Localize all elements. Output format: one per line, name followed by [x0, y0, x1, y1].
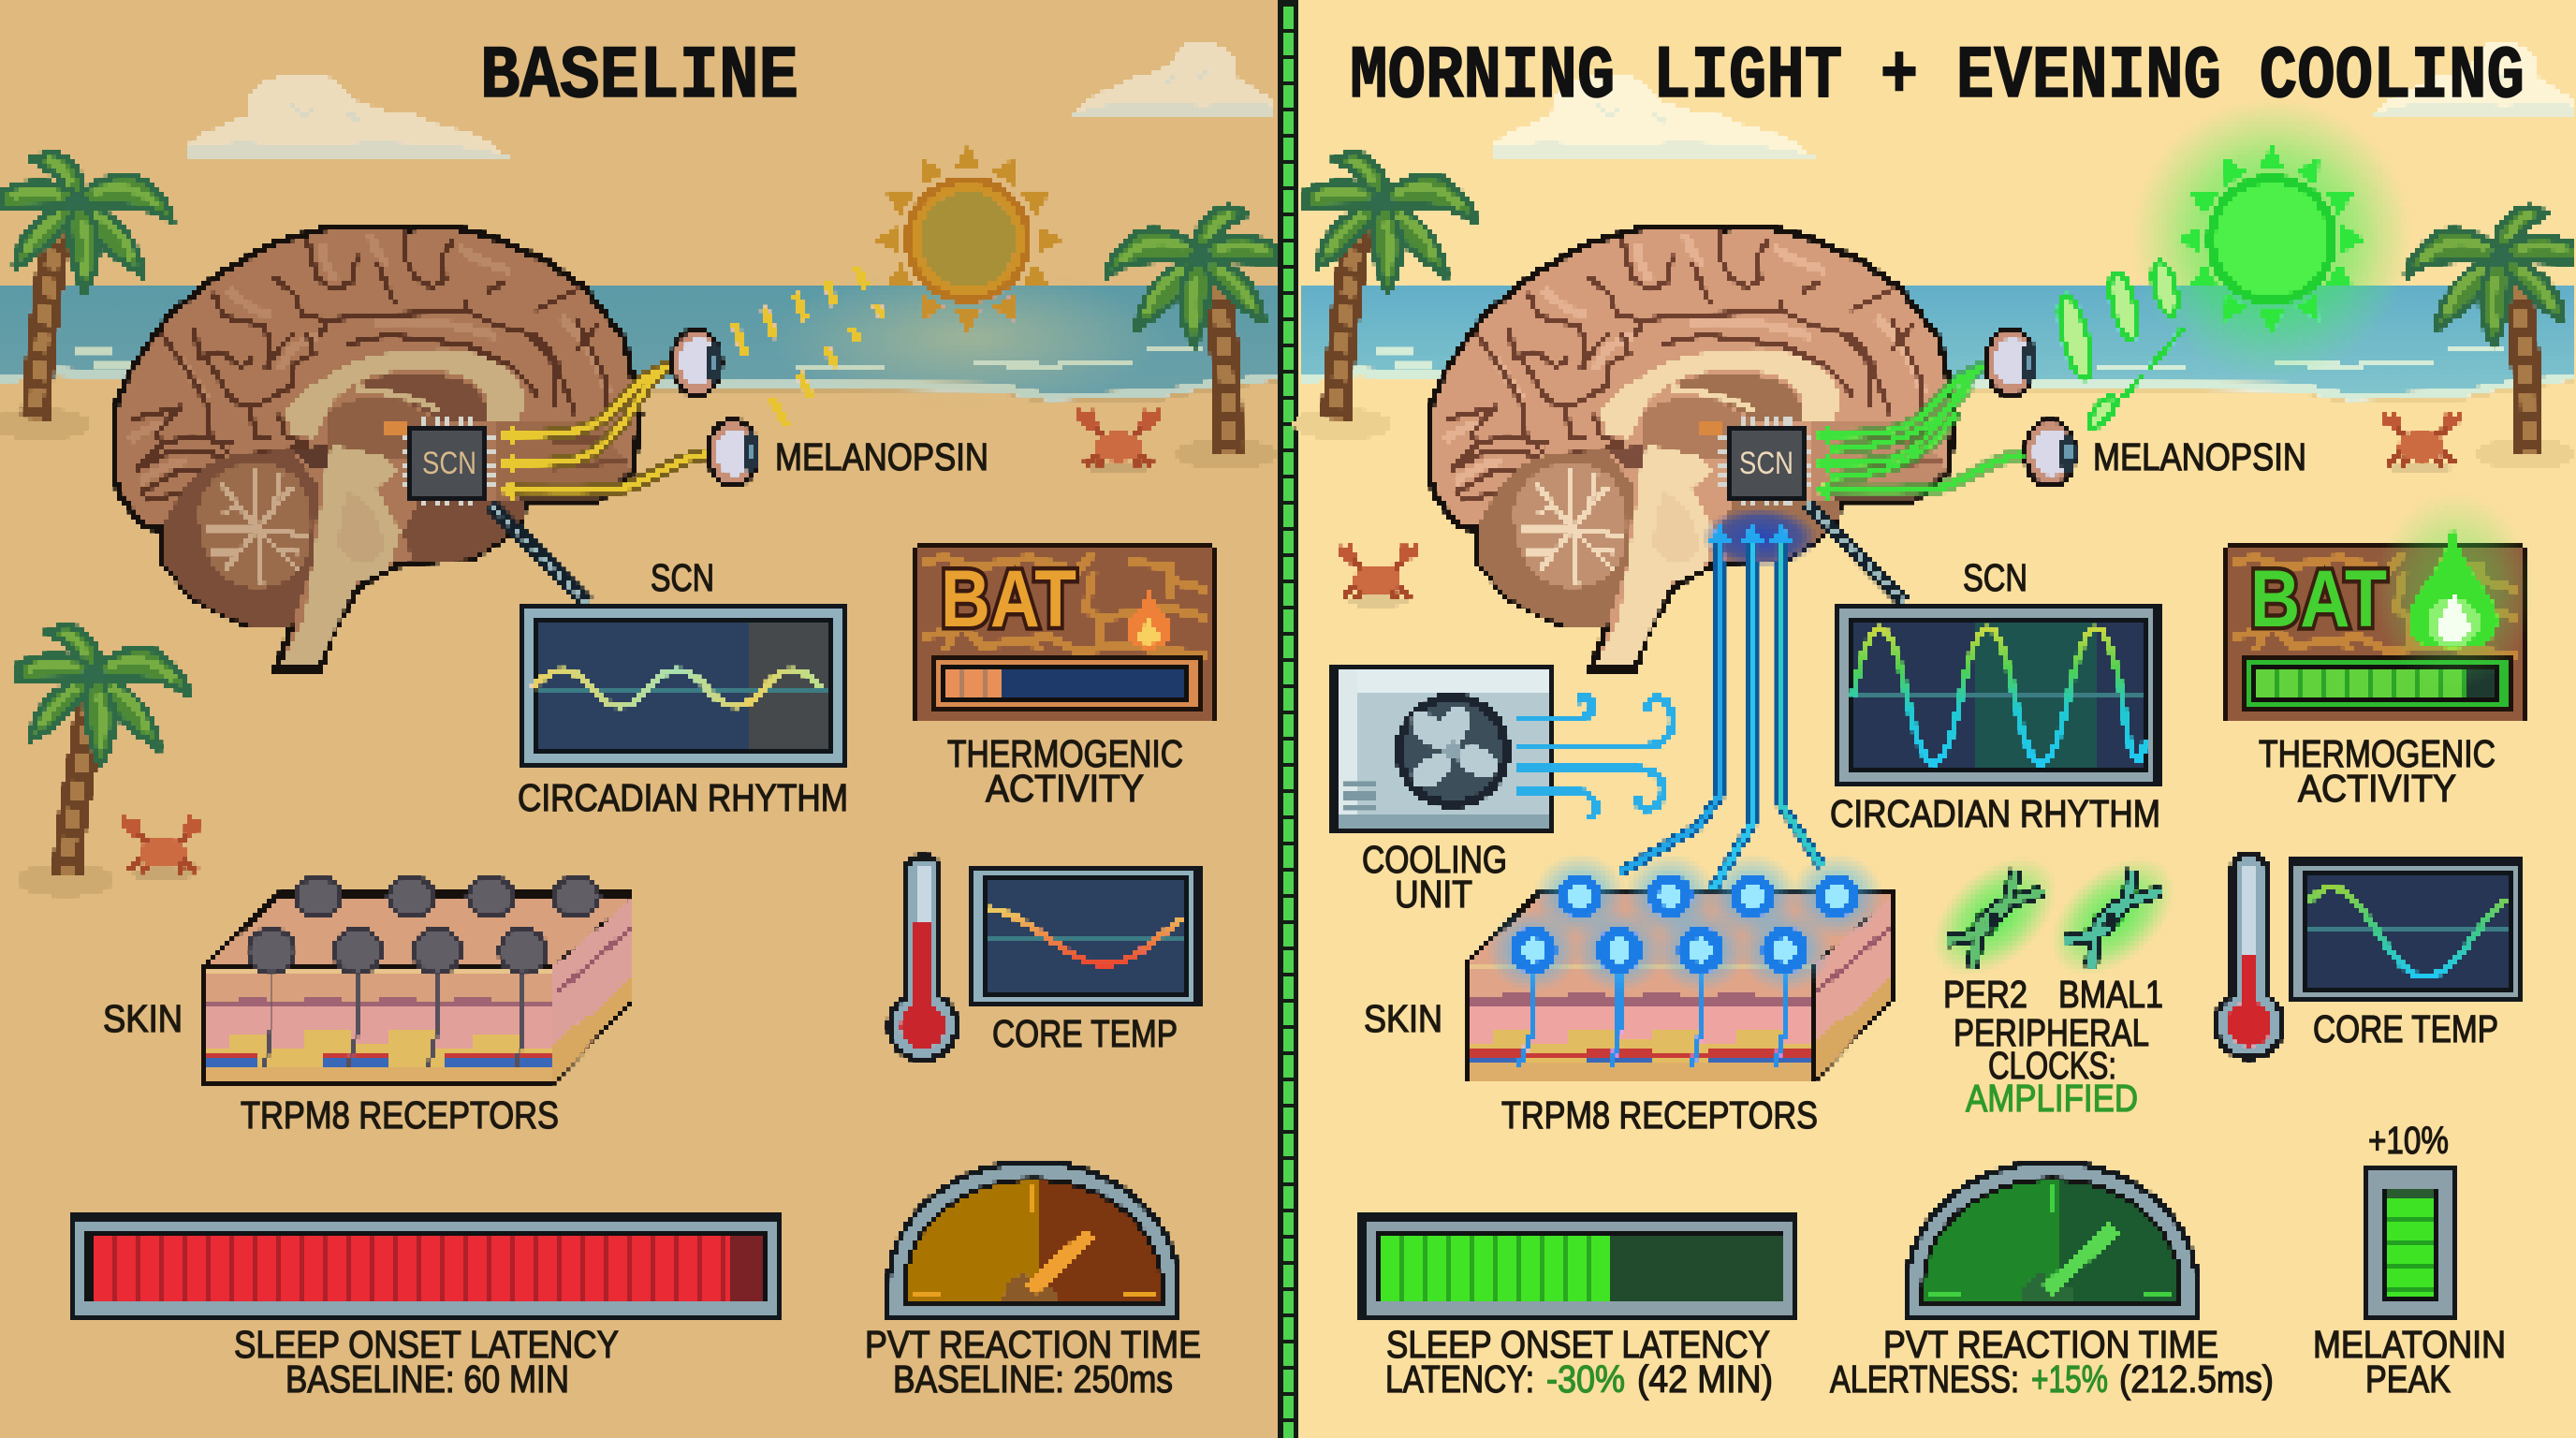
- scn chip: [1719, 418, 1813, 507]
- palm tree 1: [1293, 153, 1475, 440]
- core temp monitor: [968, 865, 1201, 1008]
- label peripheral clocks amplified: PERIPHERAL: [1954, 1011, 2149, 1054]
- label sleep onset latency: [1385, 1323, 1773, 1401]
- label core temp: CORE TEMP: [992, 1012, 1178, 1055]
- cloud right: [2373, 44, 2576, 117]
- receptor stems: [1518, 964, 1785, 1067]
- label pvt reaction time: [865, 1323, 1201, 1401]
- intervention art layer: [1293, 44, 2576, 1320]
- heading: baseline: BASELINE: [480, 35, 798, 120]
- label skin: SKIN: [103, 997, 183, 1040]
- receptor stems: [265, 964, 523, 1067]
- label sleep onset latency: (42 MIN): [1637, 1357, 1773, 1401]
- thermometer: [2213, 852, 2286, 1061]
- brain: [1429, 227, 1955, 669]
- dna helix per2: [1910, 834, 2079, 999]
- label cooling unit: UNIT: [1395, 873, 1472, 916]
- label pvt reaction time: +15%: [2031, 1357, 2108, 1401]
- palm tree 1: [0, 153, 172, 440]
- chip label: SCN: [422, 446, 476, 481]
- baseline art layer: [0, 44, 1278, 1320]
- label thermogenic activity: THERMOGENIC: [947, 732, 1183, 775]
- melatonin gauge: [2363, 1164, 2456, 1320]
- panel: morning light + evening cooling: [1293, 35, 2576, 1401]
- green light pathways: [1814, 367, 2024, 503]
- circadian monitor: [520, 602, 846, 767]
- core temp monitor: [2289, 858, 2522, 1004]
- label trpm8: TRPM8 RECEPTORS: [1501, 1093, 1818, 1137]
- label peripheral clocks amplified: [1954, 1011, 2149, 1120]
- label peripheral clocks amplified: AMPLIFIED: [1966, 1077, 2138, 1120]
- scn chip: [402, 418, 496, 507]
- crab left: [1337, 542, 1417, 608]
- cooling unit: [1331, 665, 1555, 833]
- cloud right: [1072, 44, 1275, 117]
- panel: baseline: [0, 35, 1278, 1401]
- eye lower: [706, 418, 760, 489]
- label per2 bmal1: PER2: [1943, 973, 2027, 1016]
- label thermogenic activity: ACTIVITY: [2298, 767, 2456, 810]
- dna helix bmal1: [2028, 834, 2197, 999]
- label peripheral clocks amplified: CLOCKS:: [1988, 1044, 2116, 1087]
- bat panel: [2224, 541, 2527, 723]
- label per2 bmal1: BMAL1: [2058, 973, 2163, 1016]
- cooling signal glow under chip: [1702, 507, 1818, 567]
- label skin: SKIN: [1364, 997, 1442, 1040]
- label thermogenic activity: [947, 732, 1183, 810]
- sleep onset bar green: [1359, 1213, 1797, 1320]
- palm tree 3: [17, 625, 188, 897]
- label thermogenic activity: THERMOGENIC: [2259, 732, 2496, 775]
- label pvt reaction time: PVT REACTION TIME: [1883, 1323, 2218, 1366]
- yellow light pathways: [499, 367, 707, 503]
- bat text: BAT: [2250, 554, 2387, 644]
- label pvt reaction time: ALERTNESS:: [1830, 1357, 2019, 1401]
- crab left: [123, 815, 203, 881]
- label scn: SCN: [1963, 556, 2027, 599]
- label sleep onset latency: SLEEP ONSET LATENCY: [1386, 1323, 1770, 1366]
- label melatonin peak: [2313, 1323, 2506, 1401]
- label cooling unit: COOLING: [1362, 838, 1507, 881]
- label circadian rhythm: CIRCADIAN RHYTHM: [1830, 792, 2160, 835]
- skin block with grey receptors: [201, 877, 633, 1086]
- label melatonin peak: PEAK: [2365, 1357, 2451, 1401]
- dim sun: [873, 145, 1062, 334]
- wire to monitor: [490, 504, 587, 602]
- label melanopsin: MELANOPSIN: [2093, 435, 2306, 478]
- label thermogenic activity: [2259, 732, 2496, 810]
- eye upper: [1983, 327, 2038, 398]
- pvt gauge: [886, 1159, 1181, 1320]
- crab right: [1078, 409, 1159, 475]
- cold air streams: [1516, 697, 1673, 819]
- receptors grey: [248, 877, 599, 974]
- label per2 bmal1: [1943, 973, 2163, 1016]
- bright green sun: [2177, 145, 2366, 334]
- brain: [114, 227, 640, 669]
- skin block with active receptors: [1463, 854, 1895, 1083]
- label pvt reaction time: BASELINE: 250ms: [893, 1357, 1173, 1401]
- palm tree 2: [2407, 207, 2576, 470]
- label melatonin peak: MELATONIN: [2313, 1323, 2506, 1366]
- label sleep onset latency: [234, 1323, 619, 1401]
- label core temp: CORE TEMP: [2313, 1007, 2498, 1050]
- divider: [1278, 0, 1298, 1438]
- label scn: SCN: [651, 556, 714, 599]
- beach sea: [1299, 285, 2576, 404]
- bat flame: [1126, 590, 1172, 649]
- sun glow: [2131, 98, 2412, 379]
- label sleep onset latency: LATENCY:: [1385, 1357, 1534, 1401]
- bat text: BAT: [941, 554, 1076, 644]
- sleep onset bar red: [71, 1213, 782, 1320]
- label melanopsin: MELANOPSIN: [775, 435, 988, 478]
- cloud left: [1492, 76, 1814, 160]
- green light rays: [2053, 259, 2184, 431]
- eye upper: [669, 327, 724, 398]
- wire to monitor: [1807, 504, 1904, 602]
- green flame with glow: [2375, 492, 2534, 688]
- chip label: SCN: [1739, 446, 1793, 481]
- label cooling unit: [1362, 838, 1507, 916]
- label circadian rhythm: CIRCADIAN RHYTHM: [518, 776, 848, 819]
- label trpm8: TRPM8 RECEPTORS: [241, 1093, 559, 1137]
- label pvt reaction time: [1830, 1323, 2274, 1401]
- crab right: [2381, 409, 2462, 475]
- label sleep onset latency: SLEEP ONSET LATENCY: [234, 1323, 619, 1366]
- blue cooling pathways: [1620, 524, 1822, 912]
- thermometer: [886, 854, 959, 1063]
- label pvt reaction time: PVT REACTION TIME: [865, 1323, 1201, 1366]
- pvt gauge: [1904, 1159, 2200, 1320]
- receptors glowing blue: [1486, 854, 1883, 992]
- circadian monitor: [1835, 602, 2160, 785]
- cloud left: [187, 76, 509, 160]
- bat panel: [914, 541, 1217, 723]
- label sleep onset latency: -30%: [1546, 1357, 1625, 1401]
- palm tree 2: [1106, 207, 1276, 470]
- label pvt reaction time: (212.5ms): [2119, 1357, 2274, 1401]
- weak light rays: [735, 267, 883, 426]
- eye lower: [2023, 418, 2077, 489]
- label melatonin +10%: +10%: [2368, 1119, 2449, 1162]
- beach sea: [0, 267, 1278, 407]
- label thermogenic activity: ACTIVITY: [986, 767, 1144, 810]
- label sleep onset latency: BASELINE: 60 MIN: [285, 1357, 569, 1401]
